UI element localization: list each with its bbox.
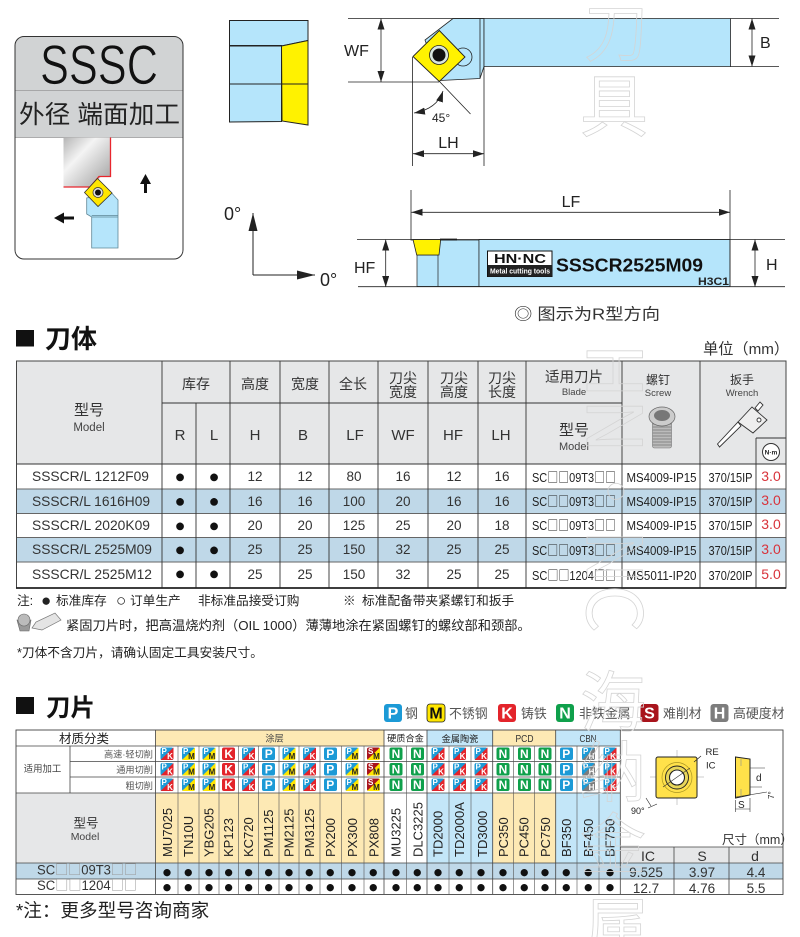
table rows: 3.0 bbox=[761, 468, 781, 484]
table rows: MS4009-IP15 bbox=[626, 543, 696, 558]
watermark: brand text bbox=[565, 0, 675, 937]
insert group headers: PCD bbox=[516, 733, 534, 745]
table header labels: 库存 bbox=[182, 376, 210, 392]
icon: insert dimension drawing bbox=[631, 747, 776, 816]
insert table row labels: 粗切削 bbox=[125, 780, 153, 791]
icon: insert dimension drawing: d bbox=[756, 773, 762, 784]
grade names: PC450 bbox=[516, 817, 532, 857]
icon: workpiece bbox=[64, 138, 110, 187]
text: exclusion note: *刀体不含刀片，请确认固定工具安装尺寸。 bbox=[17, 645, 263, 660]
icon: insert dimension drawing: IC bbox=[706, 760, 716, 772]
text: footer note: *注：更多型号咨询商家 bbox=[16, 900, 209, 921]
insert dimensions: 3.97 bbox=[689, 865, 715, 880]
text: stock legend note: 标准库存 bbox=[56, 593, 107, 608]
table rows: SC□□09T3□□ bbox=[532, 467, 616, 486]
table rows: 3.0 bbox=[761, 541, 781, 557]
icon: insert dimension drawing: RE bbox=[706, 747, 719, 758]
table header labels: Screw bbox=[645, 388, 671, 399]
grade names: MU3225 bbox=[389, 808, 404, 857]
availability dots bbox=[162, 862, 615, 896]
table rows: 16 bbox=[395, 469, 411, 484]
icon: wrench bbox=[718, 402, 767, 447]
badges: high speed row: MMMMM bbox=[188, 752, 380, 761]
text: stock legend note: 注: bbox=[17, 594, 33, 608]
insert group headers: 硬质合金 bbox=[387, 732, 424, 744]
panel: insert table bbox=[16, 730, 793, 896]
grade names: TD2000A bbox=[452, 802, 467, 857]
heading: insert: 刀片 bbox=[46, 694, 95, 722]
table rows: 25 bbox=[297, 542, 313, 557]
watermark: brand text: HN·NC bbox=[565, 343, 675, 633]
table rows: MS4009-IP15 bbox=[626, 494, 696, 509]
grade names: DLC3225 bbox=[410, 802, 426, 857]
table rows: SSSCR/L 1212F09 bbox=[32, 468, 149, 484]
text: stock legend note: ● bbox=[41, 591, 51, 610]
table rows: 20 bbox=[247, 518, 263, 533]
table rows: 150 bbox=[343, 567, 365, 582]
icon: insert dimension drawing: 7° bbox=[767, 791, 776, 799]
availability dots: ●●●●●●●●●●●●●●●●●●●●●● bbox=[162, 877, 615, 896]
insert group headers bbox=[265, 732, 596, 745]
grade names bbox=[160, 802, 618, 857]
grade names: TN10U bbox=[181, 816, 196, 857]
insert dimensions bbox=[629, 848, 766, 896]
table header labels: WF bbox=[391, 427, 415, 444]
icon: insert top view bbox=[413, 30, 465, 82]
table rows: MS5011-IP20 bbox=[626, 568, 696, 583]
text: grade marking: H3C1 bbox=[698, 276, 729, 288]
table rows: 25 bbox=[395, 518, 411, 533]
table rows: 16 bbox=[247, 494, 263, 509]
table rows: 370/20IP bbox=[708, 568, 752, 583]
table rows: SC□□09T3□□ bbox=[532, 491, 616, 510]
insert dimensions: IC bbox=[641, 848, 655, 864]
legend: material classes: 钢 bbox=[405, 706, 418, 721]
table rows: 25 bbox=[297, 567, 313, 582]
grade names: KP123 bbox=[221, 818, 236, 857]
heading: insert bbox=[16, 694, 95, 722]
table header labels: Model bbox=[73, 422, 105, 434]
icon: insert dimension drawing: S bbox=[738, 800, 745, 811]
table rows: 5.0 bbox=[761, 566, 781, 582]
insert group headers: 金属陶瓷 bbox=[442, 733, 478, 744]
grade names: PM3125 bbox=[302, 809, 317, 857]
watermark: brand text: 纳 bbox=[580, 720, 646, 816]
badges: high speed row: PPPPPPPSPPPPP bbox=[162, 747, 611, 756]
icon: red machined edge bbox=[64, 138, 110, 187]
table header labels: 刀尖 bbox=[440, 370, 468, 386]
text: stock legend note: ○ bbox=[116, 591, 126, 610]
text: orientation note: ◎ 图示为R型方向 bbox=[514, 306, 660, 324]
chart: top view drawing: B bbox=[760, 35, 771, 52]
grade names: TD3000 bbox=[475, 811, 490, 857]
insert table row labels: SC□□1204□□ bbox=[37, 874, 137, 894]
heading: SSSC: SSSC bbox=[40, 33, 158, 96]
table header labels: 宽度 bbox=[291, 376, 319, 392]
table rows: 370/15IP bbox=[708, 494, 752, 509]
insert dimensions: 4.4 bbox=[747, 865, 766, 880]
table rows: 25 bbox=[494, 567, 510, 582]
icon: HN-NC logo: Metal cutting tools bbox=[490, 268, 550, 276]
table rows: 150 bbox=[343, 542, 365, 557]
icon: torque bbox=[762, 444, 780, 460]
table header labels bbox=[73, 369, 758, 453]
grade names: BF450 bbox=[581, 819, 596, 857]
table header labels: Wrench bbox=[726, 388, 758, 399]
availability dots: ●●●●●●●●●●●●●●●●●●●●●● bbox=[162, 862, 615, 881]
table rows: 25 bbox=[446, 567, 462, 582]
badges: rough row: KKKKKKHK bbox=[167, 783, 616, 792]
grade names: PM2125 bbox=[282, 809, 296, 857]
table header labels: 型号 bbox=[74, 402, 104, 419]
table rows: 16 bbox=[494, 494, 510, 509]
icon: holder bbox=[87, 193, 118, 248]
table rows: ●● bbox=[175, 564, 219, 584]
watermark: brand text: 海 bbox=[580, 650, 646, 746]
icon: section sketch block bbox=[230, 20, 308, 125]
grade names: PX200 bbox=[323, 818, 338, 857]
table header labels: R bbox=[175, 427, 186, 444]
table header labels: H bbox=[250, 427, 260, 444]
table header labels: 刀尖 bbox=[389, 370, 417, 386]
chart: rake angle axes: 0° bbox=[320, 270, 337, 290]
panel: tool body table bbox=[16, 361, 786, 588]
table rows: 370/15IP bbox=[708, 518, 752, 533]
insert dimensions: 12.7 bbox=[633, 881, 659, 896]
table rows: 25 bbox=[494, 542, 510, 557]
text: stock legend note: 订单生产 bbox=[130, 594, 181, 608]
text: stock legend note: 非标准品接受订购 bbox=[198, 593, 300, 608]
table rows: 16 bbox=[297, 494, 313, 509]
legend: material classes: K bbox=[501, 706, 513, 722]
legend: material classes: H bbox=[714, 706, 725, 722]
insert table row labels bbox=[24, 732, 153, 894]
legend: material classes: S bbox=[644, 706, 655, 722]
grade names: BF750 bbox=[602, 819, 618, 857]
table header labels: 型号 bbox=[559, 422, 589, 439]
table header labels: 高度 bbox=[440, 384, 468, 400]
table rows: 370/15IP bbox=[708, 470, 752, 485]
table header labels: 高度 bbox=[241, 376, 269, 392]
table rows: ●● bbox=[175, 539, 219, 559]
legend: material classes: P bbox=[388, 706, 399, 722]
legend: material classes: 铸铁 bbox=[521, 706, 547, 721]
badges: rough row: PPPPPPPSPPPPP bbox=[162, 778, 611, 787]
table rows: SSSCR/L 2525M09 bbox=[32, 541, 152, 557]
table header labels: 螺钉 bbox=[646, 373, 670, 387]
insert dimensions: 4.76 bbox=[689, 881, 715, 896]
table header labels: 适用刀片 bbox=[545, 369, 603, 386]
table rows: ●● bbox=[175, 467, 219, 487]
insert table row labels: SC□□09T3□□ bbox=[37, 858, 137, 878]
text: unit: 单位（mm） bbox=[703, 341, 789, 358]
insert table row labels: Model bbox=[71, 831, 99, 843]
insert dimensions: S bbox=[697, 848, 707, 864]
icon: screw bbox=[649, 407, 675, 448]
chart: top view drawing bbox=[344, 18, 779, 166]
table rows: 100 bbox=[343, 494, 365, 509]
table rows: SC□□1204□□ bbox=[532, 565, 616, 584]
insert group headers: 涂层 bbox=[265, 732, 284, 744]
table rows: 80 bbox=[346, 469, 362, 484]
legend: material classes: 高硬度材 bbox=[733, 706, 785, 721]
table header labels: 全长 bbox=[339, 376, 367, 392]
table rows: 12 bbox=[446, 469, 462, 484]
table rows: 20 bbox=[446, 518, 462, 533]
legend: material classes: 不锈钢 bbox=[449, 706, 488, 721]
chart: top view drawing: WF bbox=[344, 43, 369, 60]
table header labels: Blade bbox=[562, 387, 586, 398]
watermark: brand text: 具 bbox=[580, 52, 648, 151]
badges: general row: KKKKKKHK bbox=[167, 768, 616, 777]
table header labels: L bbox=[210, 427, 218, 444]
table rows: 20 bbox=[395, 494, 411, 509]
badges: high speed row: KKKKKKHK bbox=[167, 752, 616, 761]
icon: HN-NC logo: HN·NC bbox=[494, 252, 546, 266]
table header labels: LF bbox=[346, 427, 364, 444]
table rows: 32 bbox=[395, 542, 411, 557]
table rows: 16 bbox=[446, 494, 462, 509]
table rows: 32 bbox=[395, 567, 411, 582]
chart: top view drawing: LH bbox=[438, 135, 459, 152]
table rows: MS4009-IP15 bbox=[626, 518, 696, 533]
chart: rake angle axes: 0° bbox=[224, 204, 241, 224]
table rows: 20 bbox=[297, 518, 313, 533]
table rows: ●● bbox=[175, 491, 219, 511]
chart: side view drawing: HF bbox=[354, 260, 376, 277]
heading: turning type: 外径 端面加工 bbox=[19, 101, 180, 129]
icon: insert dimension drawing: 90° bbox=[631, 806, 645, 816]
table header labels: 扳手 bbox=[730, 373, 754, 387]
table header labels: B bbox=[298, 427, 308, 444]
grade names: MU7025 bbox=[160, 808, 175, 857]
table header labels: 长度 bbox=[488, 384, 516, 400]
grade names: PC750 bbox=[538, 817, 553, 857]
table rows: 125 bbox=[343, 518, 365, 533]
insert group headers: CBN bbox=[580, 733, 596, 745]
table rows: ●● bbox=[175, 515, 219, 535]
insert table row labels: 通用切削 bbox=[116, 764, 153, 775]
table rows: 25 bbox=[247, 567, 263, 582]
legend: material classes bbox=[384, 704, 785, 722]
text: stock legend note bbox=[17, 591, 515, 610]
text: dimension unit: 尺寸（mm） bbox=[722, 833, 793, 847]
legend: material classes: M bbox=[429, 706, 443, 722]
insert table row labels: 材质分类 bbox=[59, 732, 109, 746]
icon: HN-NC logo bbox=[488, 251, 552, 276]
table rows: 25 bbox=[247, 542, 263, 557]
chart: rake angle axes bbox=[224, 204, 337, 290]
chart: side view drawing bbox=[354, 190, 785, 288]
table rows: 12 bbox=[297, 469, 313, 484]
grade names: PM1125 bbox=[261, 810, 276, 857]
legend: material classes: 非铁金属 bbox=[579, 706, 631, 721]
table header labels: HF bbox=[443, 427, 463, 444]
table rows: 25 bbox=[446, 542, 462, 557]
table header labels: 宽度 bbox=[389, 384, 417, 400]
grade names: BF350 bbox=[559, 819, 574, 857]
table rows: 16 bbox=[494, 469, 510, 484]
insert table row labels: 适用加工 bbox=[24, 763, 61, 774]
table header labels: Model bbox=[559, 441, 589, 453]
table rows: SC□□09T3□□ bbox=[532, 515, 616, 534]
table rows bbox=[32, 467, 781, 584]
watermark: brand text: 金 bbox=[580, 792, 646, 888]
text: stock legend note: ※ bbox=[343, 594, 356, 608]
badges: high speed row: KPPNNNNNP bbox=[224, 747, 570, 761]
grade names: PX808 bbox=[367, 818, 382, 857]
table rows: SSSCR/L 2525M12 bbox=[32, 566, 152, 582]
insert table row labels: 型号 bbox=[73, 816, 99, 830]
insert dimensions: 9.525 bbox=[629, 865, 663, 880]
insert dimensions: 5.5 bbox=[747, 881, 765, 896]
text: model marking: SSSCR2525M09 bbox=[556, 254, 703, 276]
insert table row labels: 高速·轻切削 bbox=[104, 748, 153, 760]
chart: side view drawing: H bbox=[766, 257, 778, 274]
panel: SSSC type badge bbox=[15, 33, 183, 259]
table rows: 12 bbox=[247, 469, 263, 484]
chart: side view drawing: LF bbox=[562, 194, 581, 211]
badges: general row: PPPPPPPSPPPPP bbox=[162, 762, 611, 772]
table rows: SSSCR/L 1616H09 bbox=[32, 493, 150, 509]
heading: tool body: 刀体 bbox=[45, 324, 97, 354]
badges: general row: MMMMM bbox=[188, 768, 380, 777]
grade names: PC350 bbox=[496, 817, 511, 857]
text: assembly note: 紧固刀片时，把高温烧灼剂（OIL 1000）薄薄地涂在紧固螺钉的螺纹部和颈部。 bbox=[66, 617, 531, 633]
heading: tool body bbox=[16, 324, 97, 354]
icon: up arrow bbox=[140, 174, 151, 193]
icon: torque: N·m bbox=[765, 450, 778, 456]
badges: general row: KPPNNNNNP bbox=[224, 763, 570, 777]
insert dimensions: d bbox=[751, 848, 759, 864]
table rows: 3.0 bbox=[761, 516, 781, 532]
badges: rough row: KPPNNNNNP bbox=[224, 778, 570, 792]
grade names: YBG205 bbox=[202, 808, 216, 857]
table rows: SSSCR/L 2020K09 bbox=[32, 517, 150, 533]
table rows: MS4009-IP15 bbox=[626, 470, 696, 485]
chart: top view drawing: 45° bbox=[432, 111, 450, 125]
icon: insert bbox=[84, 178, 112, 206]
legend: material classes: N bbox=[559, 706, 571, 722]
legend: material classes: 难削材 bbox=[663, 706, 702, 721]
table rows: 3.0 bbox=[761, 492, 781, 508]
icon: oil tube and screw bbox=[17, 613, 61, 631]
grade names: KC720 bbox=[241, 817, 256, 857]
icon: left arrow bbox=[54, 212, 74, 224]
grade names: TD2000 bbox=[430, 811, 446, 857]
table rows: 18 bbox=[494, 518, 510, 533]
table header labels: 刀尖 bbox=[488, 370, 516, 386]
table rows: 370/15IP bbox=[708, 543, 752, 558]
grade names: PX300 bbox=[345, 818, 360, 857]
table rows: SC□□09T3□□ bbox=[532, 540, 616, 559]
badges: rough row: MMMMM bbox=[188, 783, 380, 792]
table header labels: LH bbox=[491, 427, 511, 444]
text: stock legend note: 标准配备带夹紧螺钉和扳手 bbox=[362, 593, 515, 608]
